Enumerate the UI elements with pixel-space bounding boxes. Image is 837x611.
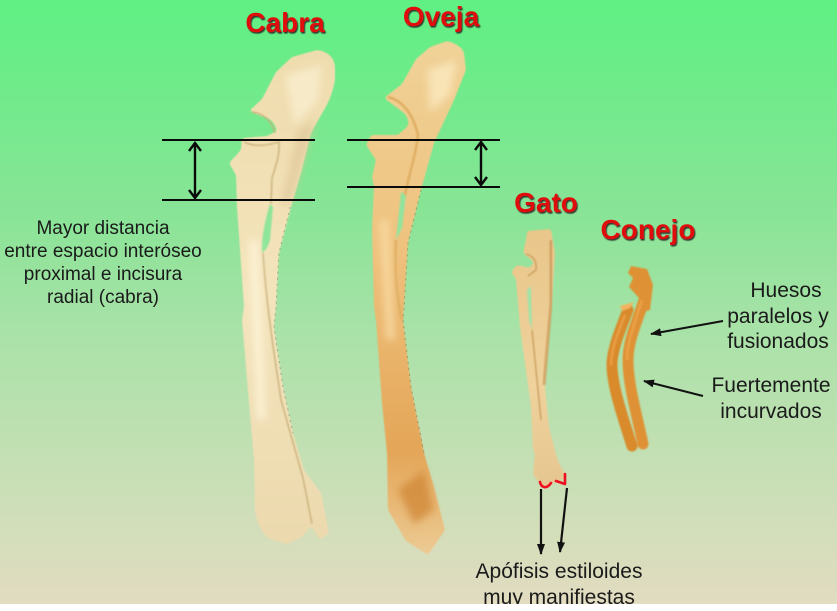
text block: apofisis estiloides [476,560,642,609]
red marks: styloid processes [540,474,565,487]
bone: conejo (rabbit fused radius and ulna) [611,266,653,446]
arrow: huesos paralelos [651,321,723,334]
text block: cabra note: proximal e incisura [24,264,183,285]
text block: cabra note: radial (cabra) [47,287,159,308]
text block: fuertemente incurvados [711,374,831,423]
interosseous space: gato [527,286,532,330]
text block: apofisis estiloides: Apófisis estiloides [476,560,642,583]
bone: cabra (goat radius and ulna) [229,50,335,544]
conejo head [628,266,653,314]
conejo shaft highlights [611,300,642,365]
heading: Conejo: Conejo [601,214,695,245]
bottom white strip [0,604,837,611]
conejo right bone [628,300,644,444]
text block: fuertemente incurvados: Fuertemente [711,374,831,397]
text block: huesos paralelos [727,279,829,353]
conejo left bone [612,310,632,446]
measurement lines and arrow: cabra [162,140,315,200]
heading: Cabra: Cabra [245,7,325,38]
text block: fuertemente incurvados: incurvados [720,400,822,423]
text block: apofisis estiloides: muy manifiestas [483,586,635,609]
measurement lines and arrow: oveja [347,140,500,187]
text block: cabra note: Mayor distancia [36,218,170,239]
bone: oveja (sheep radius and ulna) [366,41,466,555]
text block: huesos paralelos: Huesos [750,279,822,302]
heading: Gato: Gato [514,187,578,218]
interosseous space: cabra [262,204,273,253]
arrow: right styloid [560,488,567,552]
conejo radial head highlight [620,302,634,311]
arrow: fuertemente incurvados [644,381,703,396]
text block: cabra note: entre espacio interóseo [4,241,202,262]
arrow: left styloid [540,489,542,554]
text block: cabra note [4,218,202,308]
heading: Oveja: Oveja [403,1,480,32]
interosseous space: oveja [396,192,406,240]
bone: gato (cat radius and ulna) [511,229,567,489]
text block: huesos paralelos: fusionados [727,330,829,353]
text block: huesos paralelos: paralelos y [727,305,829,328]
